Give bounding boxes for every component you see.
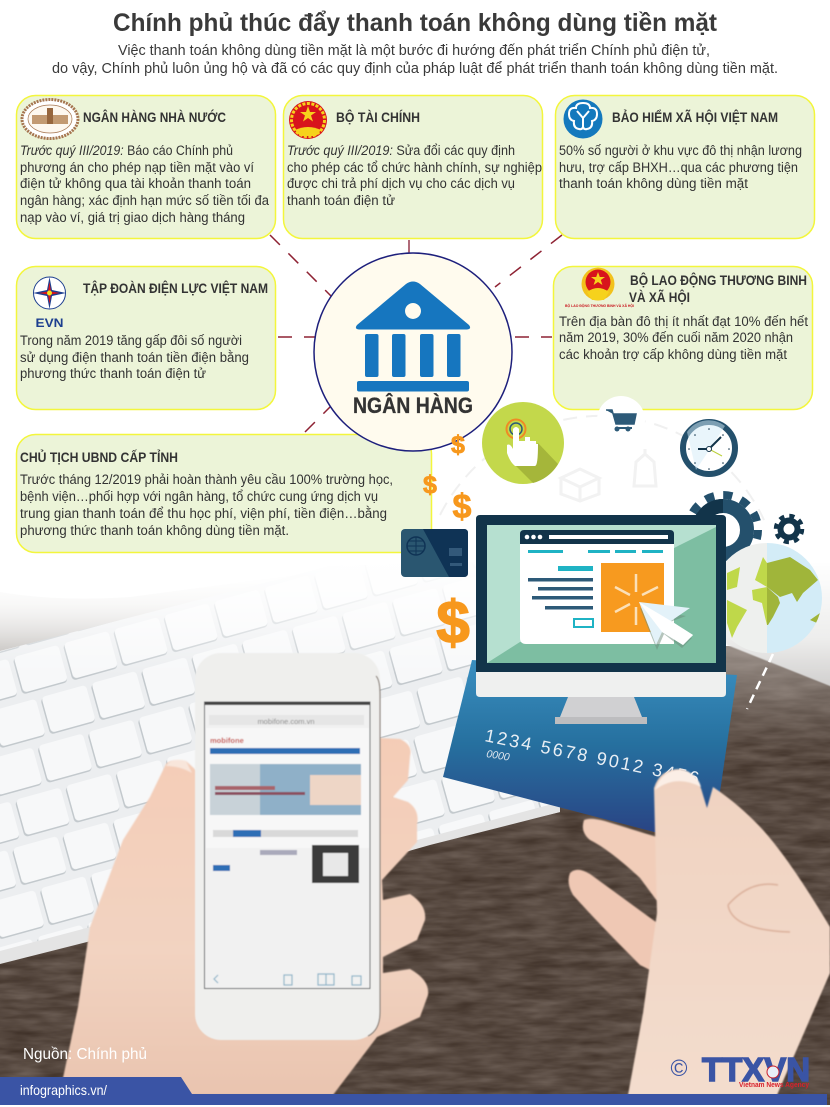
bezel (476, 515, 726, 672)
body text (20, 143, 269, 225)
small icons row (260, 850, 297, 855)
button outline (574, 619, 593, 627)
orange spark panel (601, 563, 664, 632)
heading: NGÂN HÀNG NHÀ NƯỚC (83, 110, 226, 125)
panel: Bộ Lao động Thương binh và Xã hội (554, 266, 812, 410)
newspaper at right (690, 560, 830, 700)
text lines (528, 578, 593, 610)
body text: năm 2019, 30% đến cuối năm 2020 nhận (559, 330, 793, 345)
body text: Trước quý III/2019: Báo cáo Chính phủ (20, 143, 233, 158)
subtitle: Việc thanh toán không dùng tiền mặt là một bước đi hướng đến phát triển Chính phủ điện tử, (118, 42, 710, 59)
browser address bar (209, 715, 364, 725)
phone side edge (368, 676, 380, 1036)
body text (20, 333, 249, 381)
bank card (443, 660, 737, 847)
thumbnail (655, 770, 701, 790)
phone screen (204, 702, 370, 988)
card small number: 0000 (486, 748, 511, 764)
touch rings (506, 420, 526, 438)
icon: national emblem: BỘ LAO ĐỘNG THƯƠNG BINH VÀ XÃ HỘI (565, 303, 634, 308)
central circle: Ngân hàng (314, 253, 512, 451)
body text: thanh toán điện tử (287, 193, 395, 208)
status bar (205, 702, 370, 705)
lighter wood upper right (700, 640, 830, 750)
decorative dashed arc (440, 416, 764, 520)
icon: national emblem (565, 268, 634, 308)
body text (20, 472, 393, 538)
stand (560, 697, 642, 717)
icon: EVN logo: EVN (36, 318, 64, 330)
body text: ngân hàng; xác định hạn mức số tiền tối đa (20, 193, 269, 208)
heading: BỘ LAO ĐỘNG THƯƠNG BINH (630, 273, 807, 288)
heading: BẢO HIỂM XÃ HỘI VIỆT NAM (612, 110, 778, 125)
body text: Trên địa bàn đô thị ít nhất đạt 10% đến hết (559, 314, 808, 329)
subtitle (52, 42, 778, 77)
icon: dollar signs: $ (436, 589, 470, 656)
body text: cho phép các tổ chức hành chính, sự nghiệp (287, 160, 542, 175)
body text: điện tử không qua tài khoản thanh toán (20, 176, 251, 191)
panel: Bảo hiểm xã hội Việt Nam (556, 96, 814, 238)
browser window (520, 530, 674, 644)
body text: sử dụng điện thanh toán tiền điện bằng (20, 350, 249, 365)
panel: Tập đoàn Điện lực Việt Nam (16, 266, 276, 410)
source: Nguồn: Chính phủ (23, 1046, 147, 1063)
continents (767, 557, 818, 602)
safari toolbar (214, 974, 361, 985)
white area above desk (0, 556, 830, 646)
nav links (528, 550, 663, 571)
body text: các khoản trợ cấp không dùng tiền mặt (559, 347, 787, 362)
body text: phương thức thanh toán điện tử (20, 366, 206, 381)
icon: shopping cart (597, 396, 645, 444)
icon: large gear (688, 495, 758, 565)
keyboard (0, 560, 560, 962)
active tab (233, 830, 261, 837)
footer website: infographics.vn/ (20, 1082, 107, 1098)
left hand (63, 738, 428, 1095)
icon: national emblem red (289, 101, 327, 139)
hand (507, 427, 538, 466)
right hand (569, 769, 830, 1095)
url: mobifone.com.vn (257, 717, 315, 726)
card number: 1234 5678 9012 3456 (483, 725, 701, 788)
chin (476, 672, 726, 697)
icon: dollar signs: $ (453, 488, 472, 526)
smartphone (195, 653, 380, 1040)
panel: Chủ tịch UBND cấp tỉnh (16, 434, 432, 552)
tab strip (213, 830, 358, 837)
icon: clock (683, 420, 735, 474)
thumb and palm (628, 769, 830, 1095)
finger two (569, 870, 660, 975)
thumb nail (166, 760, 192, 773)
palm crease (728, 884, 790, 932)
icon: dollar signs: $ (451, 431, 465, 459)
body text: Trong năm 2019 tăng gấp đôi số người (20, 333, 242, 348)
body text (559, 143, 802, 191)
blue button (213, 865, 230, 871)
body text: phương thức thanh toán không dùng tiền mặt. (20, 523, 289, 538)
icon: State Bank seal (22, 100, 78, 138)
video thumbnail (312, 845, 359, 883)
white fade at top of photo (0, 556, 720, 676)
grey shadow wedge above keyboard (0, 572, 320, 660)
keyboard lower rim (0, 802, 560, 964)
icon: dollar signs: $ (423, 471, 437, 499)
panel: Bộ Tài chính (284, 96, 542, 238)
body text: Trước quý III/2019: Sửa đổi các quy định (287, 143, 515, 158)
body text: được chi trả phí dịch vụ cho các dịch vụ (287, 176, 515, 191)
copyright: © (671, 1055, 688, 1081)
icon: EVN logo (33, 277, 66, 330)
body text: thanh toán không dùng tiền mặt (559, 176, 748, 191)
heading: TẬP ĐOÀN ĐIỆN LỰC VIỆT NAM (83, 281, 268, 296)
icon: social insurance logo (564, 100, 602, 138)
body text: Trước tháng 12/2019 phải hoàn thành yêu cầu 100% trường học, (20, 472, 393, 487)
body text (559, 314, 808, 362)
footer bar (0, 1077, 827, 1105)
blue navigation bar (210, 748, 360, 754)
mobifone logo: mobifone (210, 736, 244, 745)
icon: faint shirt on hanger (634, 449, 656, 486)
heading: CHỦ TỊCH UBND CẤP TỈNH (20, 450, 178, 465)
icon: bank building (356, 282, 470, 392)
icon: globe (726, 543, 822, 653)
wood desk (0, 640, 830, 1105)
label: NGÂN HÀNG (353, 393, 473, 418)
agency tagline: Vietnam News Agency (739, 1080, 810, 1089)
icon: computer monitor (476, 515, 726, 724)
body text: nạp vào ví, giá trị giao dịch hàng tháng (20, 210, 245, 225)
photo: hands holding phone and bank card over keyboard (0, 556, 830, 1105)
body text: bệnh viện…phối hợp với ngân hàng, tổ chức cung ứng dịch vụ (20, 489, 378, 504)
TTXVN logo: TTXVN (702, 1051, 810, 1088)
icon: tap on green circle (482, 402, 564, 484)
dashed white line under globe (747, 654, 773, 709)
cursor (639, 602, 693, 650)
web page body (206, 728, 369, 848)
icon: faint parcel box (561, 469, 599, 501)
icon: dollar signs (423, 431, 472, 656)
body text (287, 143, 542, 208)
subtitle: do vậy, Chính phủ luôn ủng hộ và đã có các quy định của pháp luật để phát triển thanh toán không dùng tiền mặt. (52, 60, 778, 77)
panel: Ngân hàng Nhà nước (16, 96, 276, 238)
icon: small gear (776, 516, 802, 542)
body text: hưu, trợ cấp BHXH…qua các phương tiện (559, 160, 798, 175)
finger one (583, 819, 660, 905)
body text: phương án cho phép nạp tiền mặt vào ví (20, 160, 254, 175)
screen (487, 525, 716, 663)
icon: payment card small (401, 529, 468, 577)
body text: 50% số người ở khu vực đô thị nhận lương (559, 143, 802, 158)
heading line two: VÀ XÃ HỘI (629, 290, 690, 305)
body text: trung gian thanh toán để thu học phí, viện phí, tiền điện…bằng (20, 506, 387, 521)
heading: BỘ TÀI CHÍNH (336, 110, 420, 125)
hero image (210, 764, 361, 815)
dashed connector lines (270, 235, 562, 432)
globe mark (767, 1066, 779, 1078)
title: Chính phủ thúc đẩy thanh toán không dùng tiền mặt (113, 9, 718, 37)
